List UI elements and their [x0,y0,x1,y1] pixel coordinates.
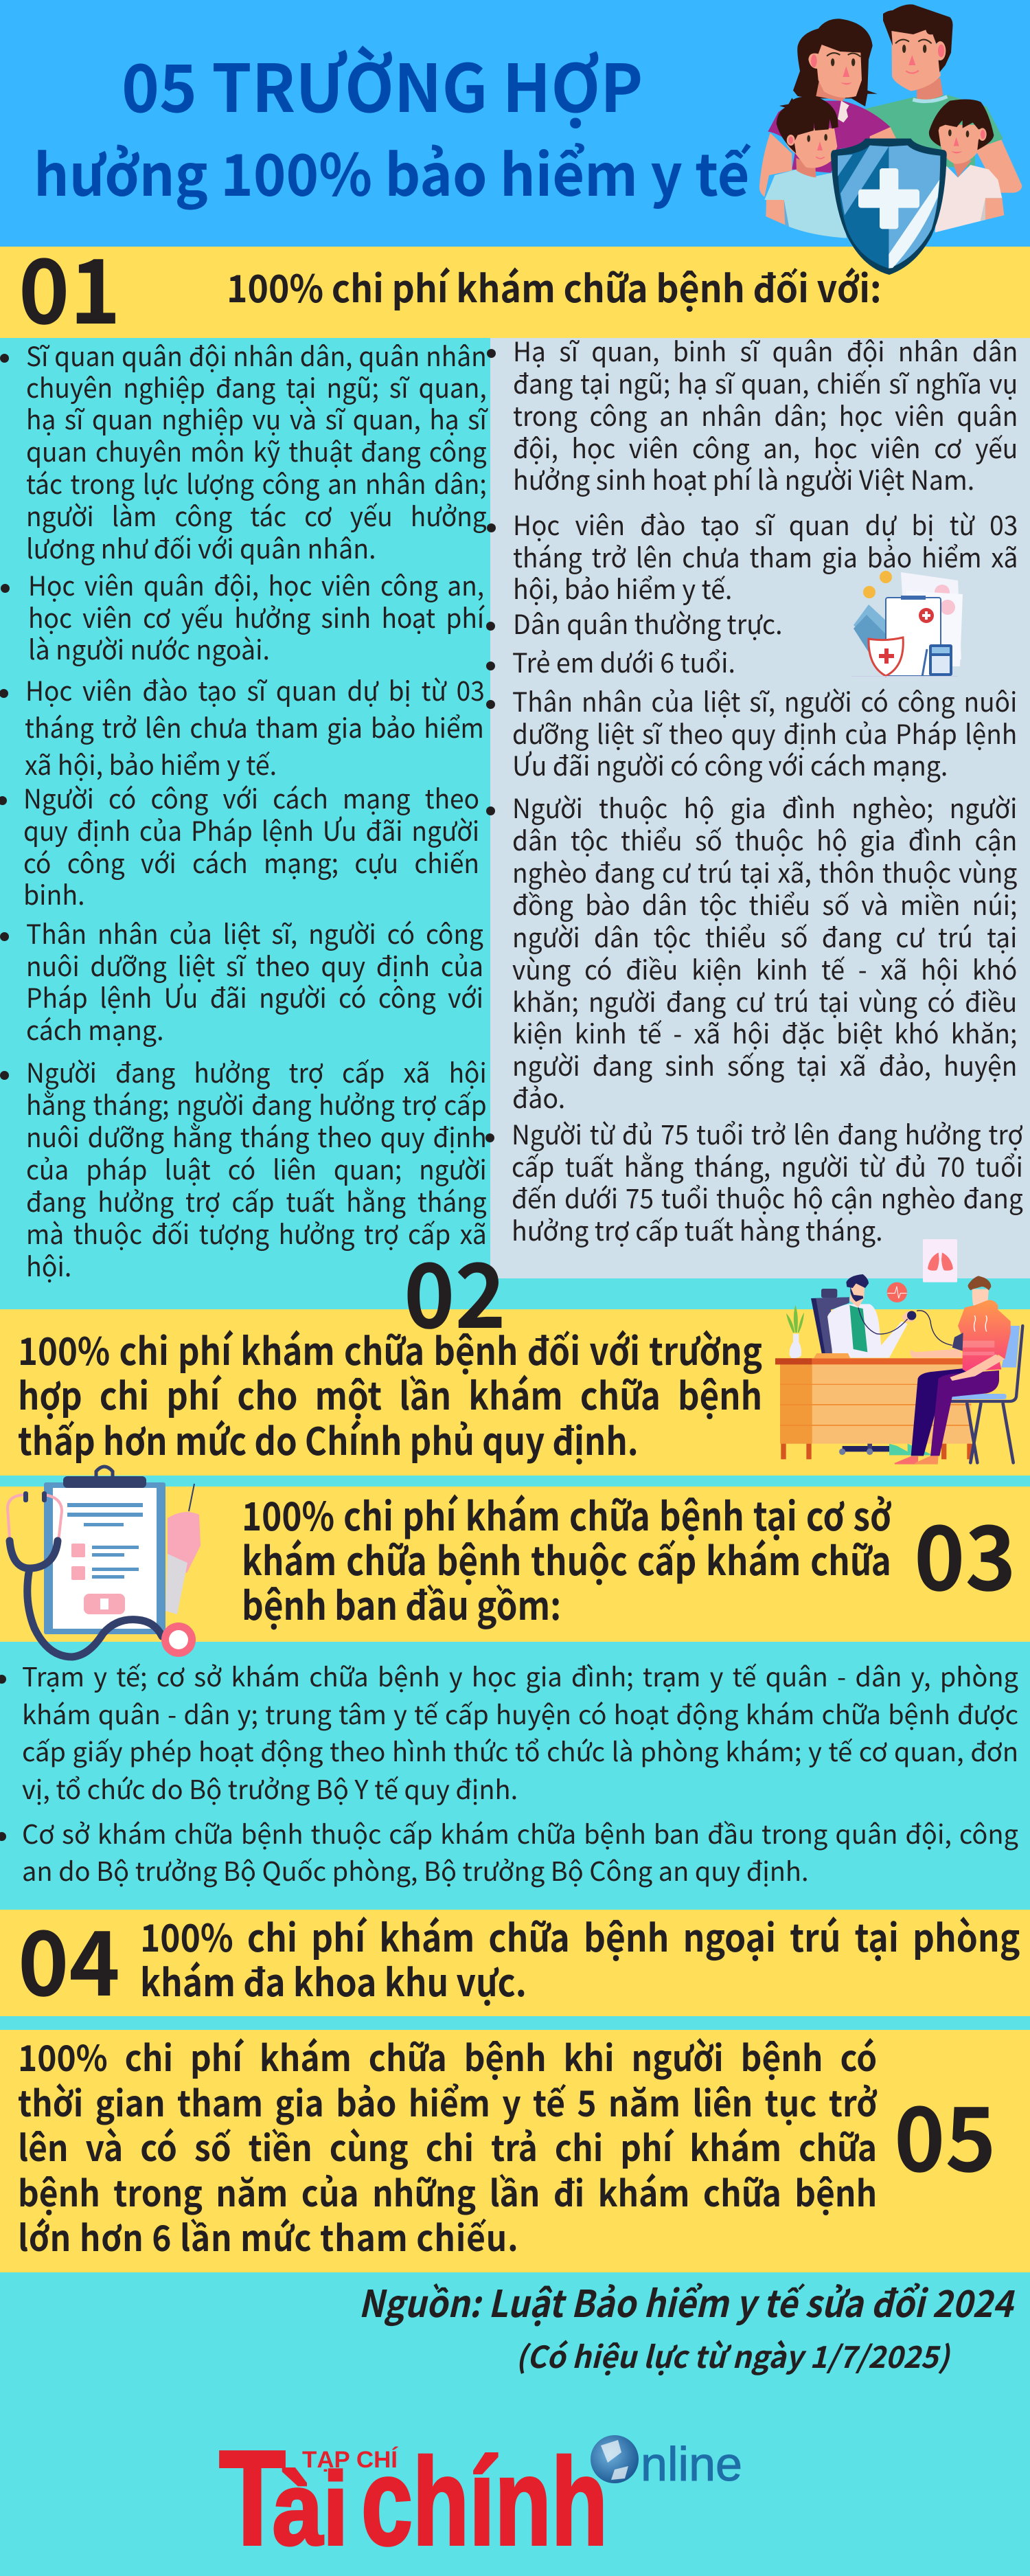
list item 2: Học viên quân đội, học viên công an, [28,565,484,604]
list item 3: Học viên đào tạo sĩ quan dự bị từ 03 [25,670,485,709]
logo: Tạp chí Tài chính Online [219,2425,742,2555]
right item 1 [487,331,1018,498]
heading 03: khám chữa bệnh thuộc cấp khám chữa [242,1530,891,1587]
heading 04: khám đa khoa khu vực. [140,1952,527,2007]
list item 6: đang hưởng trợ cấp tuất hằng tháng [26,1182,487,1220]
effective date: (Có hiệu lực từ ngày 1/7/2025) [516,2333,949,2377]
list item 6: mà thuộc đối tượng hưởng trợ cấp xã [26,1214,487,1252]
list: right column [485,331,1023,1249]
right item 6: đảo. [512,1078,565,1116]
right item 6: người dân tộc thiểu số đang cư trú tại [512,917,1017,956]
list item 6 [0,1052,487,1285]
right item 3: Dân quân thường trực. [513,604,783,642]
right item 1: đang tại ngũ; hạ sĩ quan, chiến sĩ nghĩa vụ [513,363,1018,402]
number 04: 04 [18,1893,120,2022]
illustration: clipboard with stethoscope and syringe [5,1465,201,1661]
list: section 03 [0,1656,1018,1888]
right item 2 [487,505,1018,607]
list item 1 [0,336,488,567]
right item 5: Thân nhân của liệt sĩ, người có công nuôi [512,681,1017,720]
number 01: 01 [19,221,121,350]
list item: military and police facilities: Cơ sở khám chữa bệnh thuộc cấp khám chữa bệnh ban đầu trong quân đội, công [22,1814,1018,1851]
heading 05: bệnh trong năm của những lần đi khám chữa bệnh [18,2165,877,2217]
right item 7: đến dưới 75 tuổi thuộc hộ cận nghèo đang [512,1178,1023,1217]
right item 6: đồng bào dân tộc thiểu số và miền núi; [512,885,1017,923]
number 02: 02 [404,1225,506,1354]
list item 1: người làm công tác cơ yếu hưởng [26,496,487,534]
list item 4: Người có công với cách mạng theo [23,778,479,817]
list item 6: hội. [26,1246,71,1285]
right item 6: nghèo đang cư trú tại xã, thôn thuộc vùng [512,852,1017,891]
list item 5: Thân nhân của liệt sĩ, người có công [26,914,483,952]
right item 2: Học viên đào tạo sĩ quan dự bị từ 03 [513,505,1018,543]
list item 4 [0,778,479,913]
right item 2: hội, bảo hiểm y tế. [513,569,732,607]
list item 1: hạ sĩ quan nghiệp vụ và sĩ quan, hạ sĩ [26,399,487,438]
right item 6 [486,788,1017,1116]
source line: Nguồn: Luật Bảo hiểm y tế sửa đổi 2024 [358,2274,1013,2328]
list item: primary care facilities: khám quân - dân y; trung tâm y tế cấp huyện có hoạt động khám chữa bệnh được [22,1694,1018,1732]
heading 02: hợp chi phí cho một lần khám chữa bệnh [18,1366,762,1421]
right item 6: kiện kinh tế - xã hội đặc biệt khó khăn; [512,1013,1017,1052]
heading 05 [18,2030,878,2261]
list item 5: nuôi dưỡng liệt sĩ theo quy định của [26,946,483,984]
right item 1: hưởng sinh hoạt phí là người Việt Nam. [513,460,974,498]
heading 03: 100% chi phí khám chữa bệnh tại cơ sở [242,1486,891,1542]
right item 4: Trẻ em dưới 6 tuổi. [512,642,735,681]
list: left column [0,336,488,1285]
logo: Tạp chí Tài chính Online: TẠP CHÍ [302,2447,399,2473]
right item 6: vùng có điều kiện kinh tế - xã hội khó [512,949,1017,988]
list item 4: binh. [23,874,85,913]
right item 7: hưởng trợ cấp tuất hàng tháng. [512,1210,883,1249]
heading 02: 100% chi phí khám chữa bệnh đối với trường [18,1321,762,1376]
list item: primary care facilities: vị, tổ chức do Bộ trưởng Bộ Y tế quy định. [22,1769,518,1807]
heading 03 [242,1486,891,1631]
list item 5 [0,914,483,1048]
list item 1: tác trong lực lượng công an nhân dân; [26,464,487,502]
right item 6: khăn; người đang cư trú tại vùng có điều [512,982,1017,1020]
heading 05: lên và có số tiền cùng chi trả chi phí khám chữa [18,2120,877,2171]
list item 6: nuôi dưỡng hằng tháng theo quy định [26,1117,487,1155]
list item 2 [1,565,485,668]
list item 4: có công với cách mạng; cựu chiến [23,843,479,881]
heading 05: lớn hơn 6 lần mức tham chiếu. [18,2210,518,2261]
list item: primary care facilities: Trạm y tế; cơ sở khám chữa bệnh y học gia đình; trạm y tế quân - dân y, phòng [22,1656,1018,1694]
right item 5: Ưu đãi người có công với cách mạng. [512,745,948,784]
list item 4: quy định của Pháp lệnh Ưu đãi người [23,811,479,849]
heading 05: thời gian tham gia bảo hiểm y tế 5 năm liên tục trở [18,2075,877,2127]
section 02 band [0,1309,1030,1476]
list item 3: xã hội, bảo hiểm y tế. [25,745,277,783]
list item 3: tháng trở lên chưa tham gia bảo hiểm [25,708,484,746]
panel: right column background [490,338,1030,1278]
heading 05: 100% chi phí khám chữa bệnh khi người bệnh có [18,2030,877,2081]
heading 02: thấp hơn mức do Chính phủ quy định. [18,1411,639,1466]
right item 5: dưỡng liệt sĩ theo quy định của Pháp lệnh [512,714,1017,752]
logo: Tạp chí Tài chính Online: nline [641,2437,742,2491]
list item 6: của pháp luật có liên quan; người [26,1149,487,1188]
illustration: doctor and patient at desk [775,1239,1025,1465]
title [34,36,751,213]
title: hưởng 100% bảo hiểm y tế [34,130,750,213]
list item 6: Người đang hưởng trợ cấp xã hội [26,1052,487,1091]
list item 5: Pháp lệnh Ưu đãi người có công với [26,978,483,1016]
list item 1: quan chuyên môn kỹ thuật đang công [26,431,487,470]
number 03: 03 [914,1487,1016,1616]
right item 6: dân tộc thiểu số thuộc hộ gia đình cận [512,820,1017,859]
right item 7: cấp tuất hằng tháng, người từ đủ 70 tuổi [512,1146,1023,1185]
right item 2: tháng trở lên chưa tham gia bảo hiểm xã [513,537,1018,576]
number 05: 05 [894,2068,996,2197]
list item 3 [0,670,485,783]
list item 1: Sĩ quan quân đội nhân dân, quân nhân [26,336,487,374]
list item: primary care facilities [0,1656,1018,1807]
right item 5 [486,681,1017,784]
list item 1: chuyên nghiệp đang tại ngũ; sĩ quan, [26,368,487,406]
heading 04: 100% chi phí khám chữa bệnh ngoại trú tại phòng [140,1908,1020,1963]
list item: military and police facilities: an do Bộ trưởng Bộ Quốc phòng, Bộ trưởng Bộ Công an quy định. [22,1851,809,1888]
right item 1: Hạ sĩ quan, binh sĩ quân đội nhân dân [513,331,1018,370]
section 04 band [0,1910,1030,2016]
list item 6: hằng tháng; người đang hưởng trợ cấp [26,1085,487,1123]
list item 5: cách mạng. [26,1010,164,1048]
header band [0,0,1030,247]
heading 03: bệnh ban đầu gồm: [242,1575,561,1631]
list item 1: lương như đối với quân nhân. [26,528,376,567]
list item 2: học viên cơ yếu hưởng sinh hoạt phí [28,598,484,636]
right item 6: Người thuộc hộ gia đình nghèo; người [512,788,1017,826]
right item 7 [485,1114,1023,1249]
list item: primary care facilities: cấp giấy phép hoạt động theo hình thức tổ chức là phòng khám; y tế cơ quan, đơn [22,1731,1018,1769]
right item 1: trong công an nhân dân; học viên quân [513,396,1018,434]
section 05 band [0,2030,1030,2272]
list item 2: là người nước ngoài. [28,629,270,668]
icon: medical bill clipboard [851,571,963,677]
title: 05 TRƯỜNG HỢP [122,36,643,131]
right item 1: đội, học viên công an, học viên cơ yếu [513,428,1018,466]
heading 02 [18,1321,762,1466]
section 01 band [0,247,1030,338]
list item: military and police facilities [0,1814,1018,1888]
right item 7: Người từ đủ 75 tuổi trở lên đang hưởng trợ [512,1114,1023,1153]
heading 04 [140,1908,1020,2007]
section 03 band [0,1487,1030,1642]
illustration: family with shield [759,4,1022,275]
heading 01: 100% chi phí khám chữa bệnh đối với: [227,258,882,313]
right item 6: người đang sinh sống tại xã đảo, huyện [512,1046,1017,1084]
